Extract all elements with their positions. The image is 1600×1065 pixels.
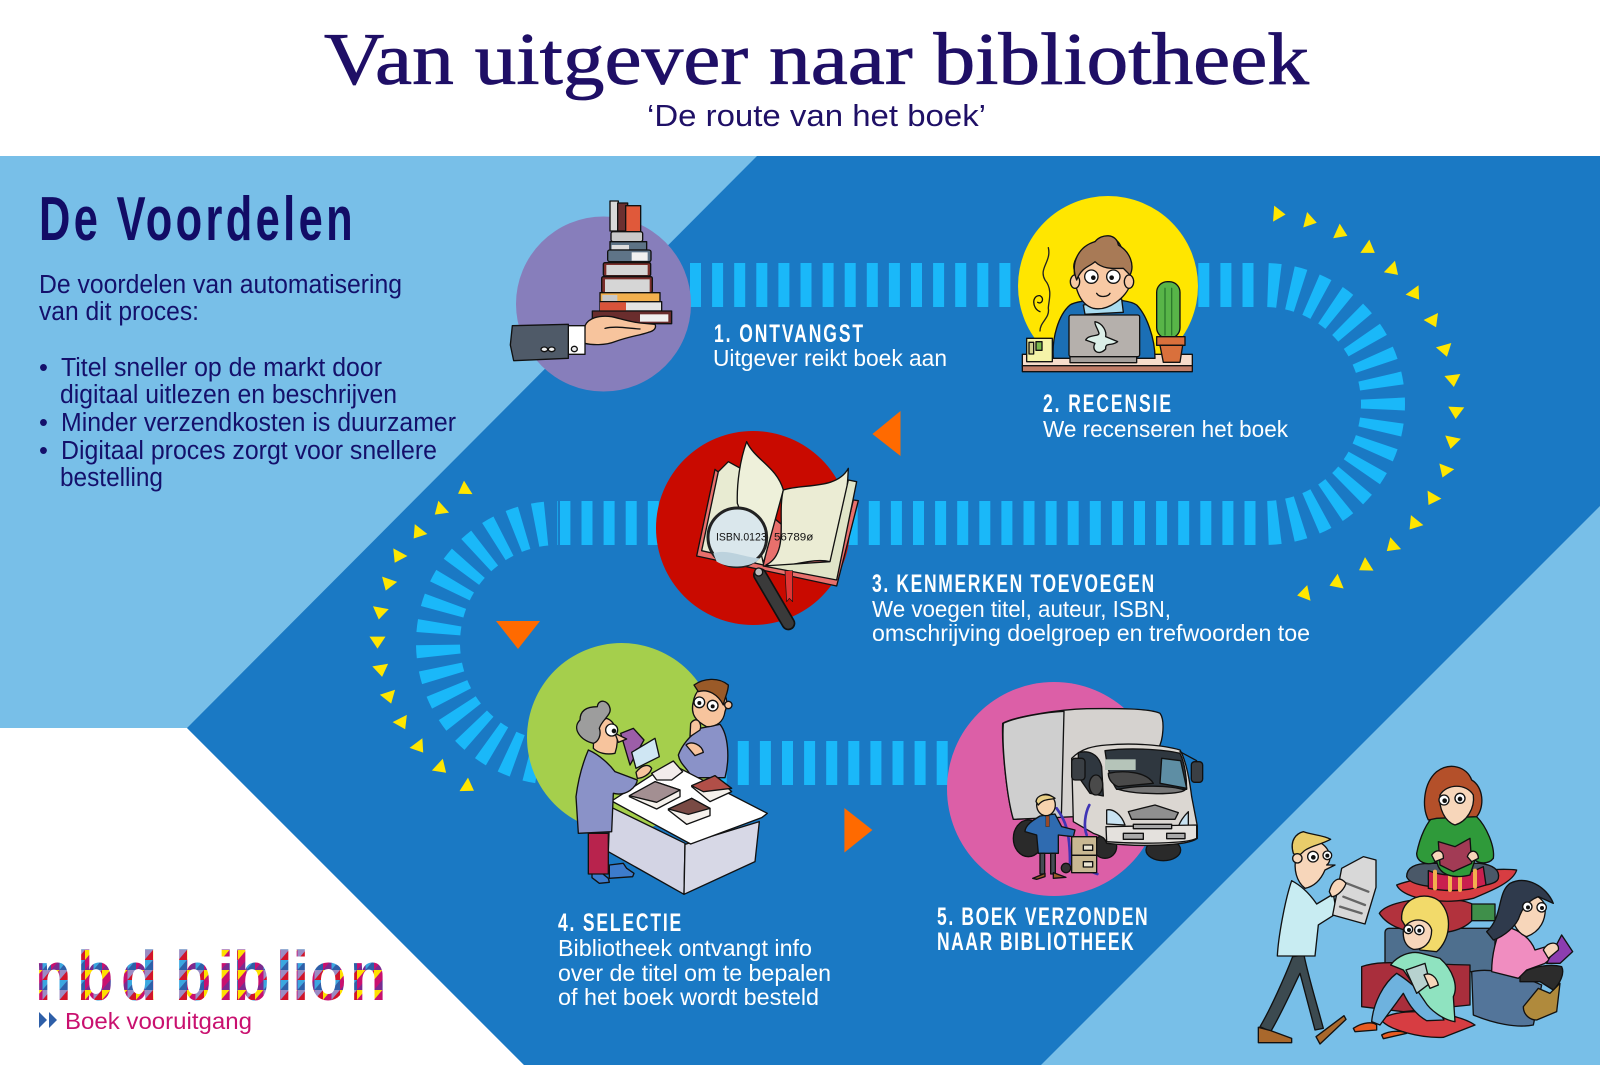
icon: hand holding stack of books	[510, 201, 672, 361]
heading: de voordelen: De Voordelen	[39, 186, 353, 254]
bullet list: digitaal uitlezen en beschrijven	[60, 381, 397, 409]
icon: librarians selecting books at a table	[576, 679, 767, 894]
subtitle: ‘De route van het boek’	[647, 98, 986, 133]
bullet list: Titel sneller op de markt door	[61, 354, 382, 382]
circle: red	[656, 431, 850, 625]
step 5 label: NAAR BIBLIOTHEEK	[937, 927, 1134, 956]
step 5 label	[937, 902, 1148, 956]
step 3 label: We voegen titel, auteur, ISBN,	[872, 596, 1171, 622]
step 1 label: Uitgever reikt boek aan	[713, 345, 947, 371]
step 3 label	[872, 569, 1310, 646]
figure: woman on top with book	[1407, 766, 1499, 891]
bullet list: bestelling	[60, 464, 163, 492]
circle: pink	[947, 682, 1161, 896]
bullet list	[39, 354, 456, 492]
arrow: orange right	[844, 808, 872, 852]
circle: purple	[516, 216, 691, 392]
bullet list: Minder verzendkosten is duurzamer	[61, 409, 456, 437]
step 1 label	[713, 319, 947, 371]
icon: open book with magnifying glass: 56789ø	[774, 532, 814, 544]
icon: reviewer with laptop	[1022, 236, 1192, 372]
step 4 label	[558, 908, 831, 1010]
step 2 label: We recenseren het boek	[1043, 416, 1288, 442]
circle: yellow	[1018, 196, 1198, 354]
figure: blonde woman reading	[1353, 896, 1475, 1039]
step 3 label: omschrijving doelgroep en trefwoorden toe	[872, 620, 1310, 646]
text block: intro: van dit proces:	[39, 298, 199, 326]
figure: man reading newspaper	[1258, 832, 1376, 1044]
logo arrows	[39, 1012, 47, 1028]
background: white lower-left corner	[0, 728, 524, 1065]
icon: open book with magnifying glass	[697, 442, 858, 623]
step 4 label: over de titel om te bepalen	[558, 960, 831, 986]
yellow triangles: left curve	[370, 481, 478, 797]
step 4 label: 4. SELECTIE	[558, 908, 681, 937]
arrow: orange down	[496, 621, 540, 649]
step 1 label: 1. ONTVANGST	[714, 319, 863, 348]
step 5 label: 5. BOEK VERZONDEN	[937, 902, 1148, 931]
logo wordmark: nbd biblion	[35, 936, 386, 1015]
figure: stacked cushions	[1362, 869, 1517, 1012]
route track: striped road	[438, 285, 1383, 763]
step 4 label: Bibliotheek ontvangt info	[558, 935, 812, 961]
logo: nbd biblion	[35, 936, 386, 1034]
icon: readers group	[1258, 766, 1573, 1044]
bullet list: Digitaal proces zorgt voor snellere	[61, 437, 437, 465]
icon: delivery truck with courier	[1003, 709, 1203, 879]
bullet list: •	[39, 409, 48, 437]
background: central blue arrow panel	[187, 156, 1600, 1065]
title: Van uitgever naar bibliotheek	[324, 19, 1309, 101]
icon: open book with magnifying glass: ISBN.0123	[716, 532, 767, 544]
text block: intro	[39, 271, 402, 326]
text block: intro: De voordelen van automatisering	[39, 271, 402, 299]
figure: dark haired woman reading	[1472, 881, 1573, 1026]
circle: green	[527, 643, 716, 832]
step 2 label	[1043, 389, 1288, 442]
step 4 label: of het boek wordt besteld	[558, 984, 819, 1010]
step 3 label: 3. KENMERKEN TOEVOEGEN	[872, 569, 1154, 598]
panel: de voordelen	[39, 186, 456, 492]
step 2 label: 2. RECENSIE	[1043, 389, 1171, 418]
arrow: orange left	[872, 411, 900, 456]
yellow triangles: right curve	[1273, 206, 1464, 603]
bullet list: •	[39, 354, 48, 382]
bullet list: •	[39, 437, 48, 465]
logo tagline: Boek vooruitgang	[65, 1008, 252, 1034]
